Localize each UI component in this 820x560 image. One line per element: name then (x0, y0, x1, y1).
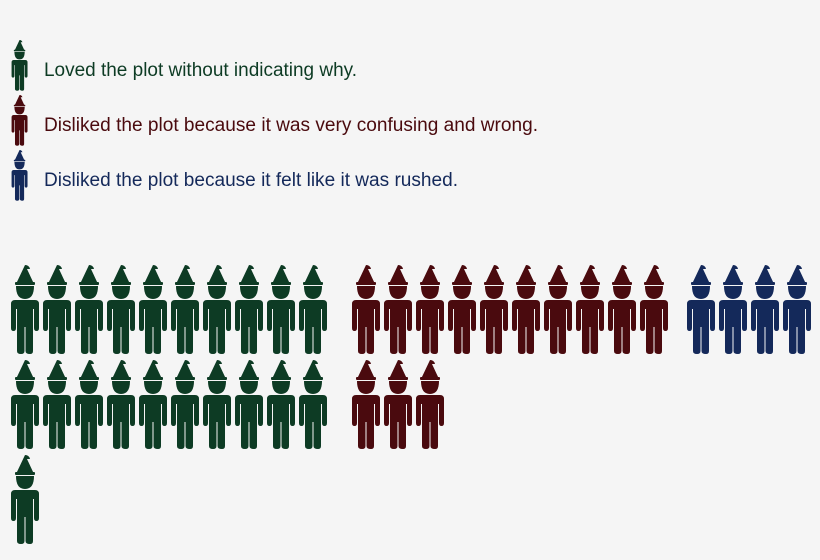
legend: loved (12, 40, 357, 91)
icon: red person legend (12, 95, 28, 146)
pictogram: blue group (4) (687, 265, 811, 354)
legend text: rushed: Disliked the plot because it felt like it was rushed. (44, 170, 458, 191)
legend: rushed (12, 150, 458, 201)
icon: blue person legend (12, 150, 28, 201)
icon: green person legend (12, 40, 28, 91)
legend: confusing (12, 95, 538, 146)
pictogram: red group (13) (352, 265, 668, 449)
legend text: confusing: Disliked the plot because it was very confusing and wrong. (44, 115, 538, 136)
legend text: loved: Loved the plot without indicating why. (44, 60, 357, 81)
pictogram: green group (21) (11, 265, 327, 544)
